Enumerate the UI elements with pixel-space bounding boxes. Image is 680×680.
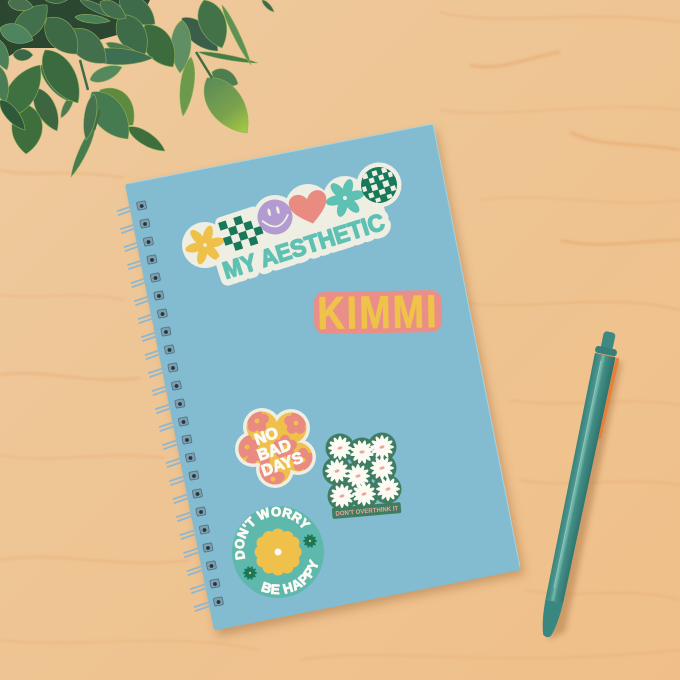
sticker: don't worry be happy <box>232 506 324 598</box>
spiral binding <box>118 201 224 611</box>
sticker: don't overthink it <box>322 432 402 519</box>
pen clip <box>598 358 619 441</box>
icon: yellow scalloped flower <box>254 528 302 576</box>
icon: small green flowers <box>243 534 317 580</box>
notebook cover <box>125 124 520 630</box>
sticker: my aesthetic <box>181 162 402 285</box>
icon: yellow flower <box>181 221 229 269</box>
plant foliage <box>0 0 276 179</box>
sticker text: no bad days: NO <box>252 425 281 449</box>
pen shadow <box>548 360 622 640</box>
sticker: kimmi: KIMMI <box>317 285 439 339</box>
sticker text: curved slogan <box>234 506 318 595</box>
icon: heart <box>287 188 332 228</box>
pen <box>536 330 624 640</box>
notebook shadow <box>131 130 524 636</box>
icon: checkerboard <box>218 211 266 253</box>
sticker text: curved slogan: DON'T WORRY <box>234 506 311 560</box>
icon: smiley <box>254 196 296 238</box>
sticker caption: DON'T OVERTHINK IT <box>335 505 399 518</box>
sticker text: no bad days: DAYS <box>259 449 306 480</box>
sticker backing <box>182 162 402 270</box>
sticker text: curved slogan: BE HAPPY <box>260 558 318 595</box>
sticker text: no bad days <box>252 425 306 480</box>
sticker text: no bad days: BAD <box>255 437 294 465</box>
sticker text: my aesthetic: MY AESTHETIC <box>220 209 388 285</box>
icon: teal flower <box>321 175 369 221</box>
sticker text: my aesthetic: MY AESTHETIC <box>220 209 388 285</box>
sticker: no bad days <box>235 408 316 488</box>
icon: disco ball <box>361 167 397 203</box>
